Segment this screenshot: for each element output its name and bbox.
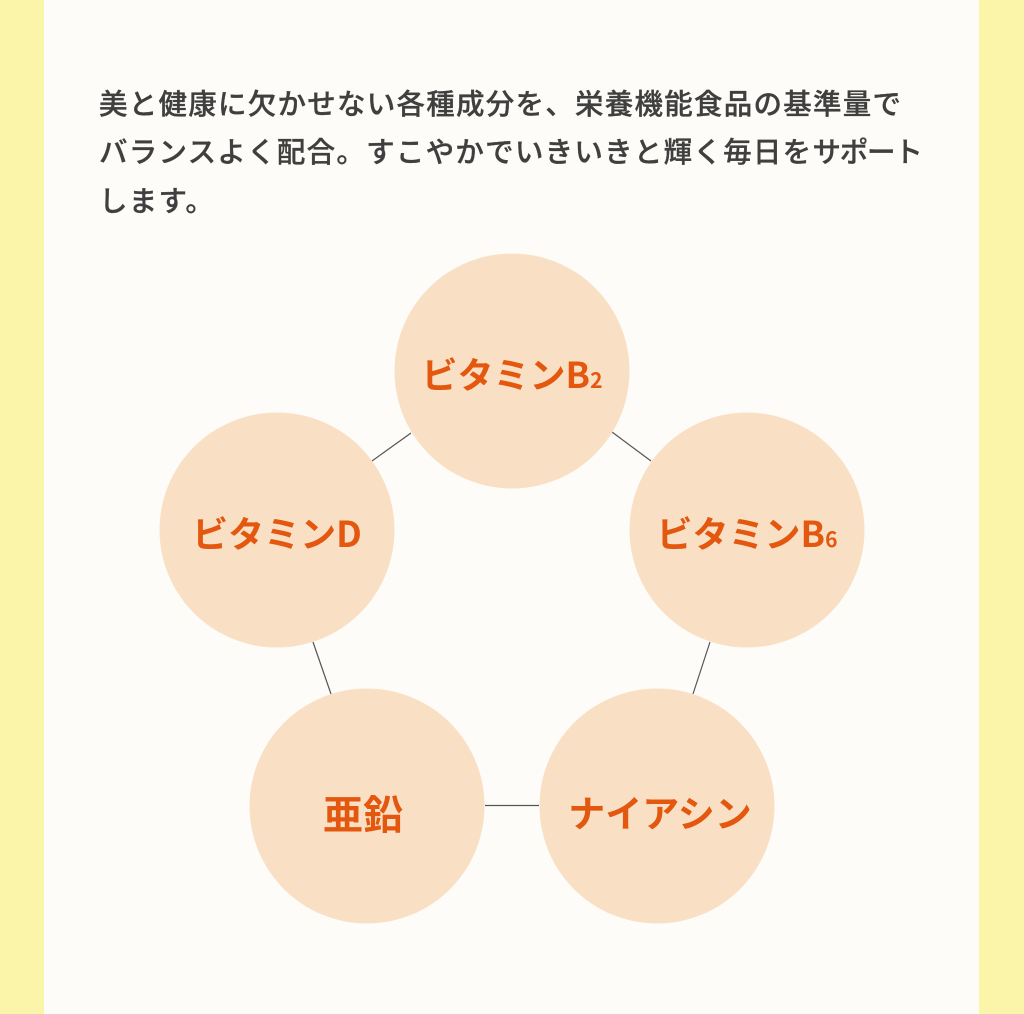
node: ナイアシン: [540, 688, 774, 924]
text block: intro: バランスよく配合。すこやかでいきいきと輝く毎日をサポート: [99, 130, 922, 171]
node: 亜鉛: 亜鉛: [323, 783, 403, 841]
text block: intro: [99, 82, 922, 220]
node: 亜鉛: [250, 688, 484, 924]
connector lines: [313, 432, 710, 806]
node: ビタミンB6: [630, 412, 864, 648]
text block: intro: します。: [99, 178, 215, 220]
node: ビタミンD: [160, 412, 394, 648]
node: ビタミンB2: ビタミンB2: [422, 347, 602, 399]
text block: intro: 美と健康に欠かせない各種成分を、栄養機能食品の基準量で: [99, 82, 902, 122]
node: ビタミンB6: ビタミンB6: [657, 506, 837, 558]
node: ビタミンD: ビタミンD: [192, 506, 362, 558]
node: ビタミンB2: [394, 254, 630, 488]
node: ナイアシン: ナイアシン: [568, 784, 752, 838]
